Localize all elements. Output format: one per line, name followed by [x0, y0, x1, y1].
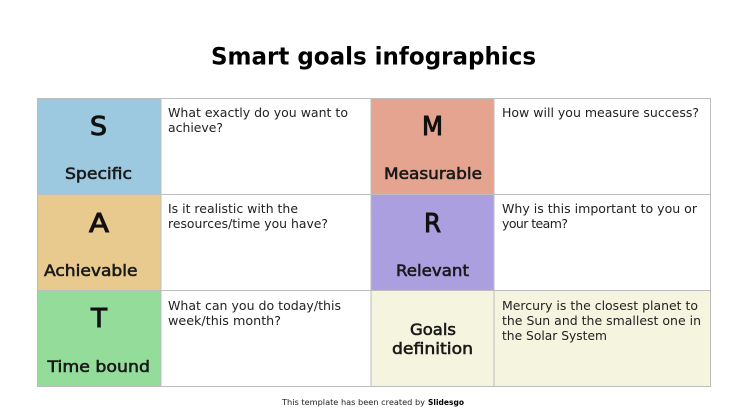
panel: achievable: A [89, 209, 109, 239]
text: time bound question [161, 290, 371, 387]
text: goals definition description: Mercury is the closest planet to [502, 298, 698, 313]
text: relevant question: your team? [502, 216, 568, 231]
text: achievable question [161, 194, 371, 290]
panel: specific [37, 98, 161, 194]
panel: relevant [371, 194, 494, 290]
panel: relevant: Relevant [396, 261, 469, 280]
text: specific question: What exactly do you want to [168, 105, 348, 120]
panel: time bound: Time bound [46, 357, 150, 376]
panel: achievable: Achievable [44, 261, 138, 280]
text: achievable question: resources/time you have? [168, 216, 328, 231]
panel: time bound: T [90, 304, 107, 334]
panel: time bound [37, 290, 161, 387]
panel: specific: S [90, 112, 107, 142]
panel: goals definition [371, 290, 494, 387]
text: measurable question [494, 98, 711, 194]
panel: achievable [37, 194, 161, 290]
text: relevant question: Why is this important to you or [502, 201, 698, 216]
text: specific question [161, 98, 371, 194]
footer credit: This template has been created by [281, 398, 426, 407]
text: specific question: achieve? [168, 120, 223, 135]
panel: measurable: M [422, 112, 443, 142]
panel: measurable [371, 98, 494, 194]
text: goals definition description [494, 290, 711, 387]
panel: measurable: Measurable [384, 164, 482, 183]
panel: goals definition: definition [392, 339, 473, 358]
text: relevant question [494, 194, 711, 290]
text: time bound question: week/this month? [168, 313, 281, 328]
panel: goals definition: Goals [410, 320, 456, 339]
text: achievable question: Is it realistic with the [168, 201, 298, 216]
text: time bound question: What can you do today/this [168, 298, 341, 313]
text: measurable question: How will you measure success? [502, 105, 699, 120]
panel: relevant: R [424, 209, 441, 239]
title: Smart goals infographics [211, 42, 536, 70]
text: goals definition description: the Sun and the smallest one in [502, 313, 701, 328]
table: smart goals grid [37, 98, 711, 387]
footer credit: Slidesgo [428, 398, 464, 407]
panel: specific: Specific [65, 164, 132, 183]
text: goals definition description: the Solar System [502, 328, 607, 343]
